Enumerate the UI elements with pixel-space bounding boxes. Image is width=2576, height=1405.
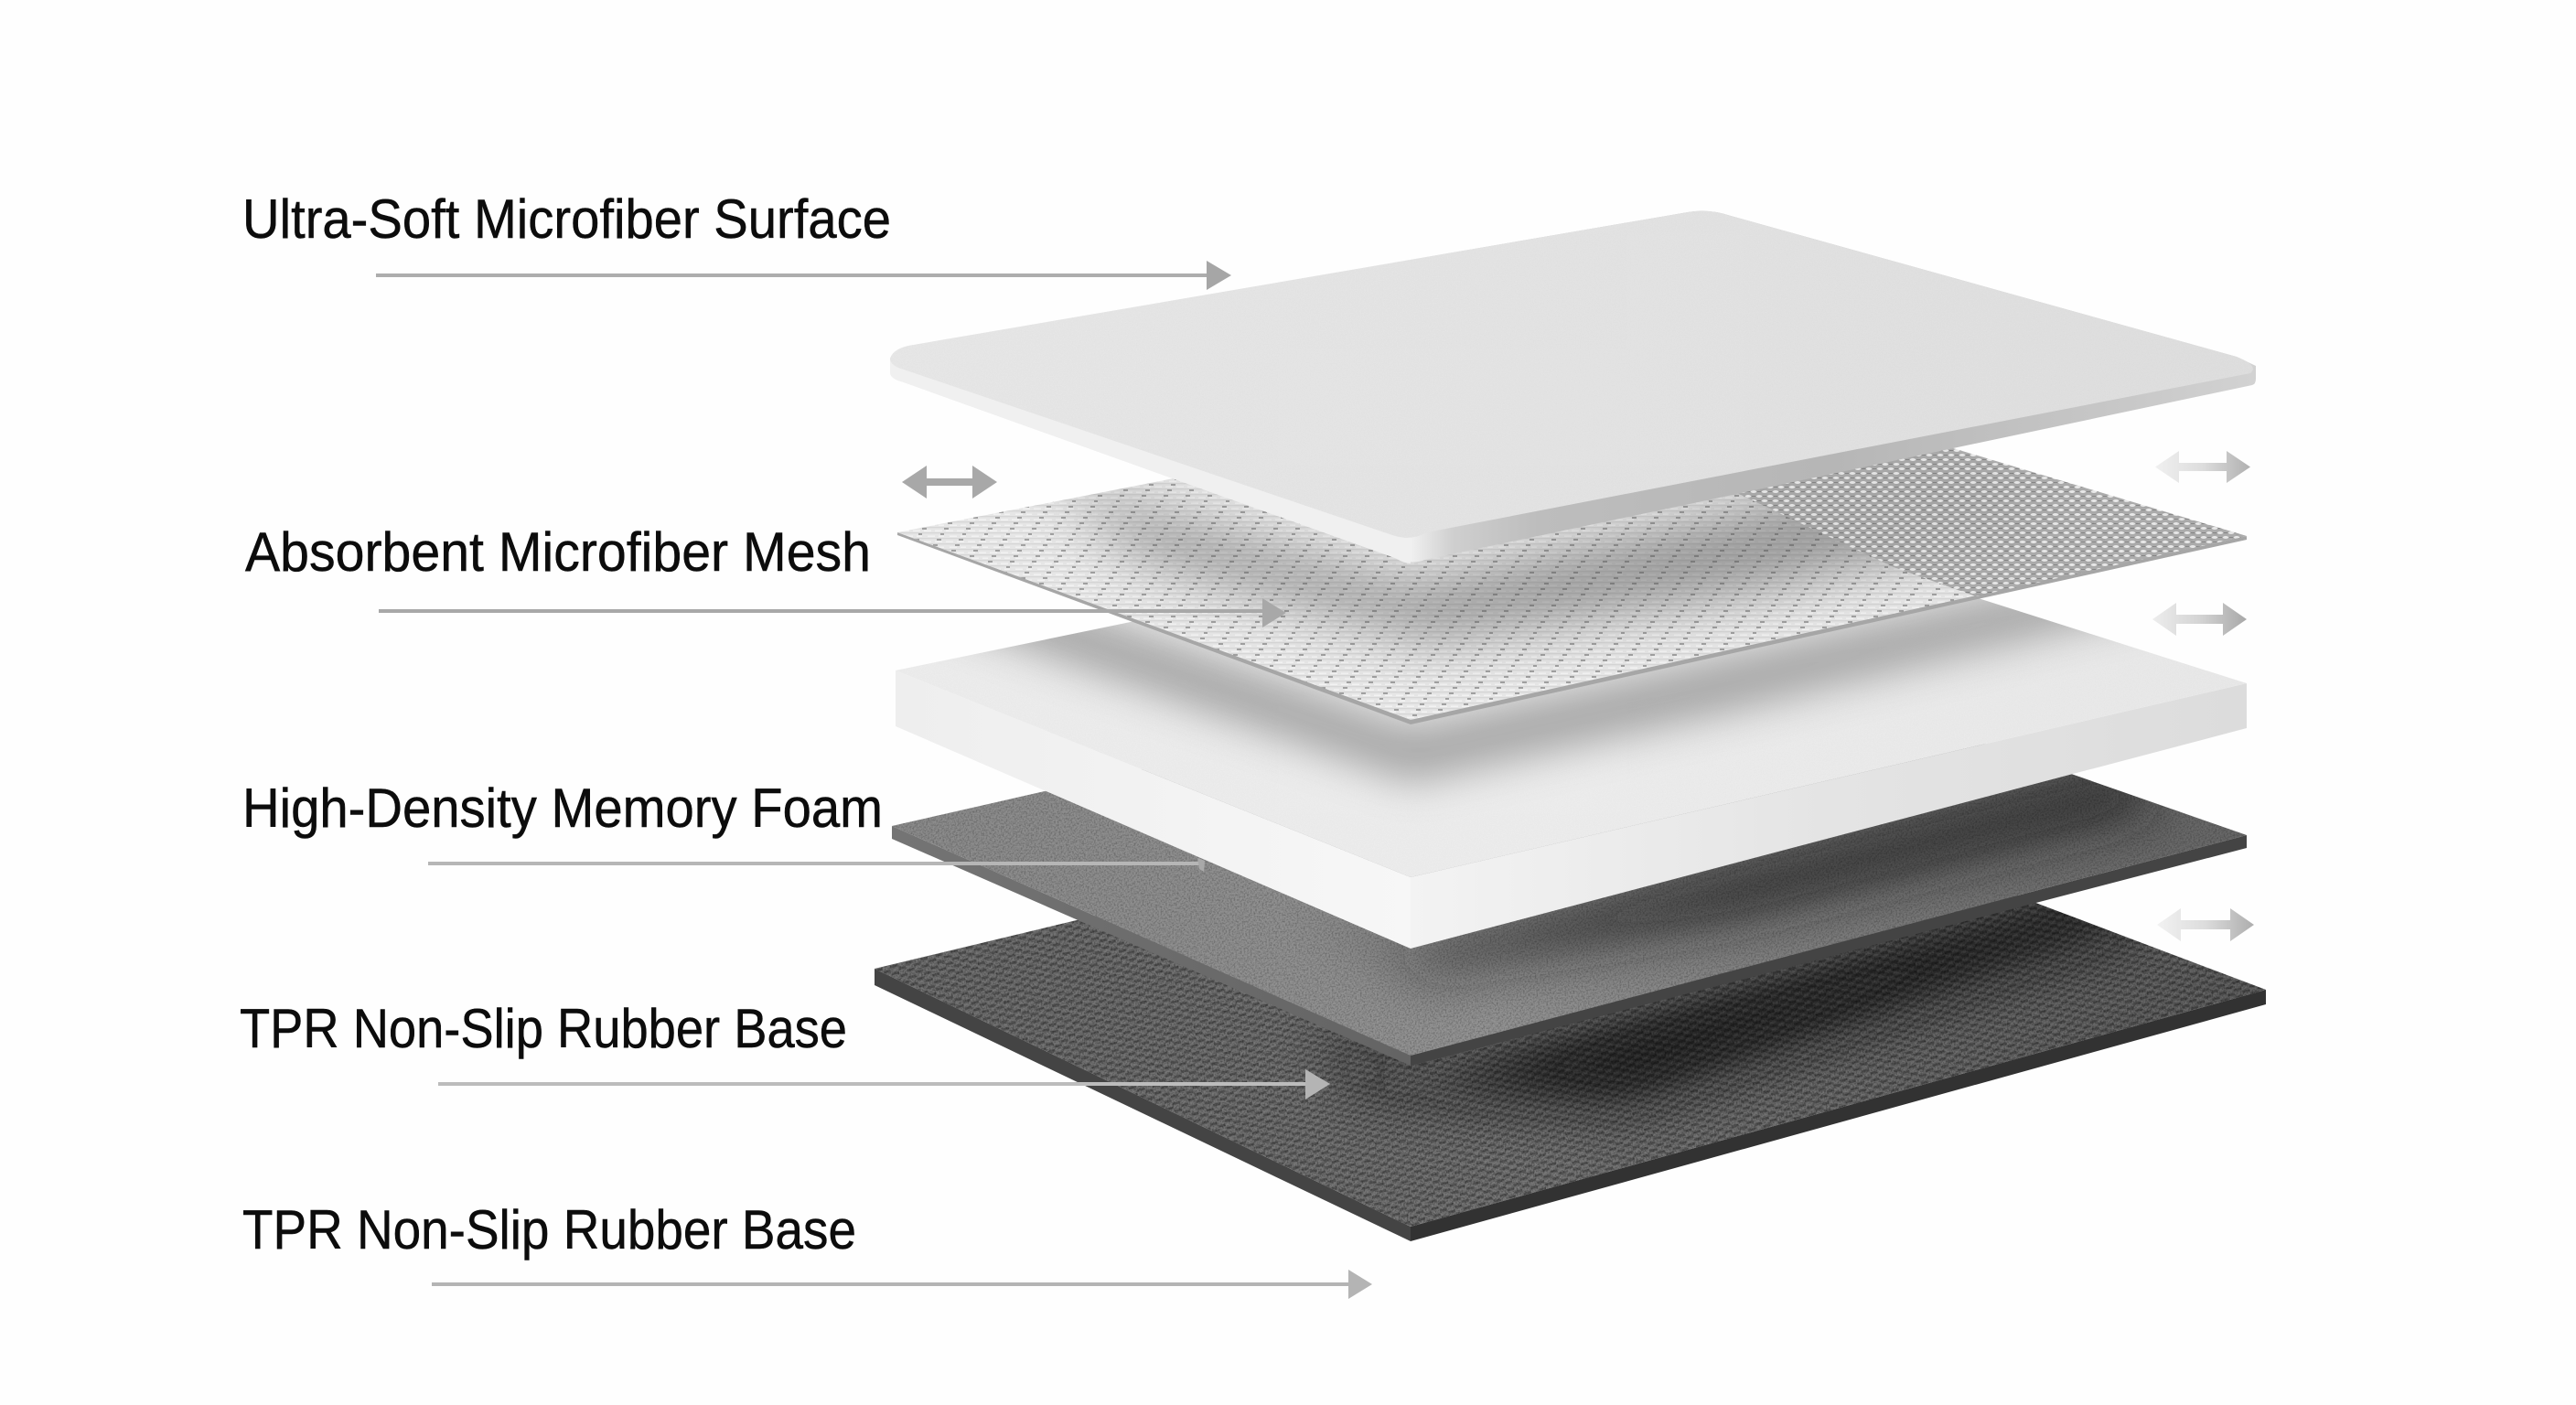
layer 2: absorbent mesh xyxy=(897,448,2247,724)
label: TPR non-slip rubber base (first): TPR Non-Slip Rubber Base xyxy=(240,998,847,1059)
double arrow: right top xyxy=(2155,451,2250,483)
label: TPR non-slip rubber base (second): TPR Non-Slip Rubber Base xyxy=(242,1199,856,1260)
arrow: ultra-soft microfiber surface xyxy=(376,261,1231,290)
label: high-density memory foam: High-Density Memory Foam xyxy=(242,778,883,839)
layer 1: microfiber surface xyxy=(883,203,2259,563)
mesh: shaded diamond weave region xyxy=(1720,448,2247,596)
label: absorbent microfiber mesh: Absorbent Microfiber Mesh xyxy=(245,521,871,583)
arrow: TPR non-slip rubber base (second) xyxy=(432,1270,1372,1299)
arrow: TPR non-slip rubber base (first) xyxy=(438,1069,1330,1099)
double arrow: right middle xyxy=(2152,603,2247,636)
double arrow: left of mesh xyxy=(902,466,997,499)
layer 4: upper rubber base xyxy=(892,744,2247,1066)
layer 3: memory foam xyxy=(896,598,2247,949)
double arrow: right lower xyxy=(2157,908,2254,941)
layer 5: bottom rubber base xyxy=(875,896,2266,1241)
arrow: absorbent microfiber mesh xyxy=(379,598,1286,627)
label: ultra-soft microfiber surface: Ultra-Soft Microfiber Surface xyxy=(242,188,891,250)
arrow: high-density memory foam xyxy=(428,858,1205,872)
